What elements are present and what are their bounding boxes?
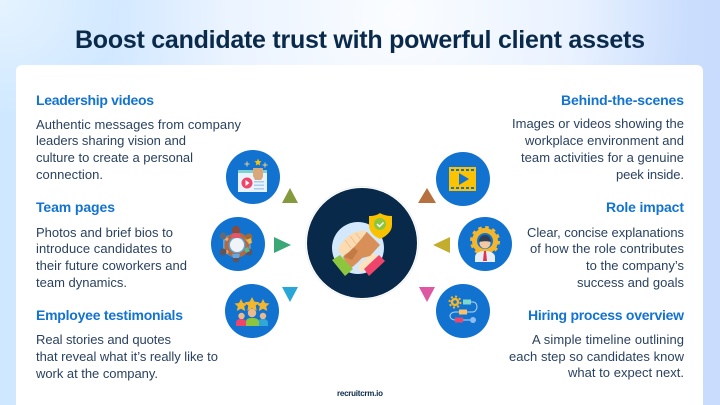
- text block: behind-the-scenes: team activities for a genuine: [521, 150, 684, 165]
- arrow: green right: [274, 237, 291, 253]
- icon: testimonials: [224, 283, 280, 339]
- icon: hiring process: [435, 283, 491, 339]
- arrow: olive up: [282, 188, 298, 203]
- text block: role impact: Clear, concise explanations: [527, 225, 684, 240]
- text block: employee testimonials: Real stories and quotes: [36, 332, 172, 347]
- text block: role impact: [527, 199, 684, 290]
- text block: behind-the-scenes: Images or videos showing the: [512, 116, 684, 131]
- text block: behind-the-scenes: Behind-the-scenes: [561, 92, 684, 108]
- text block: behind-the-scenes: workplace environment and: [524, 133, 684, 148]
- arrow: blue down: [282, 287, 298, 302]
- arrow: mustard left: [433, 237, 450, 253]
- text block: role impact: success and goals: [577, 275, 684, 290]
- text block: role impact: of how the role contributes: [530, 241, 684, 256]
- text block: leadership videos: [36, 92, 242, 182]
- icon: film strip: [435, 151, 491, 207]
- text block: hiring process overview: Hiring process overview: [528, 307, 684, 323]
- text block: employee testimonials: that reveal what it’s really like to: [36, 349, 218, 364]
- text block: hiring process overview: each step so candidates know: [509, 349, 685, 364]
- text block: role impact: to the company’s: [586, 258, 684, 273]
- text block: behind-the-scenes: peek inside.: [616, 167, 684, 182]
- text block: leadership videos: culture to create a personal: [36, 150, 193, 165]
- text block: team pages: [36, 199, 187, 290]
- title: Boost candidate trust with powerful client assets: [75, 26, 645, 54]
- text block: employee testimonials: Employee testimonials: [36, 307, 183, 323]
- text block: hiring process overview: [509, 307, 685, 380]
- text block: employee testimonials: [35, 307, 218, 381]
- text block: hiring process overview: what to expect next.: [567, 365, 684, 380]
- text block: team pages: their future coworkers and: [36, 258, 187, 273]
- text block: behind-the-scenes: [512, 92, 684, 182]
- text block: team pages: team dynamics.: [36, 275, 127, 290]
- text block: employee testimonials: work at the company.: [35, 366, 158, 381]
- icon: leadership video: [225, 149, 281, 205]
- text block: leadership videos: connection.: [36, 167, 103, 182]
- text block: leadership videos: leaders sharing vision and: [36, 133, 186, 148]
- text block: hiring process overview: A simple timeline outlining: [532, 332, 684, 347]
- footer: source: recruitcrm.io: [337, 389, 383, 398]
- text block: leadership videos: Authentic messages from company: [36, 117, 242, 132]
- text block: team pages: Photos and brief bios to: [36, 225, 173, 240]
- text block: team pages: Team pages: [36, 199, 115, 215]
- text block: team pages: introduce candidates to: [36, 241, 172, 256]
- icon: role impact: [457, 216, 513, 272]
- arrow: pink down: [419, 287, 435, 302]
- text block: role impact: Role impact: [606, 199, 684, 215]
- text block: leadership videos: Leadership videos: [36, 92, 154, 108]
- icon: central handshake: [306, 186, 418, 300]
- icon: team pages: [210, 216, 266, 272]
- arrow: brown up: [418, 188, 436, 203]
